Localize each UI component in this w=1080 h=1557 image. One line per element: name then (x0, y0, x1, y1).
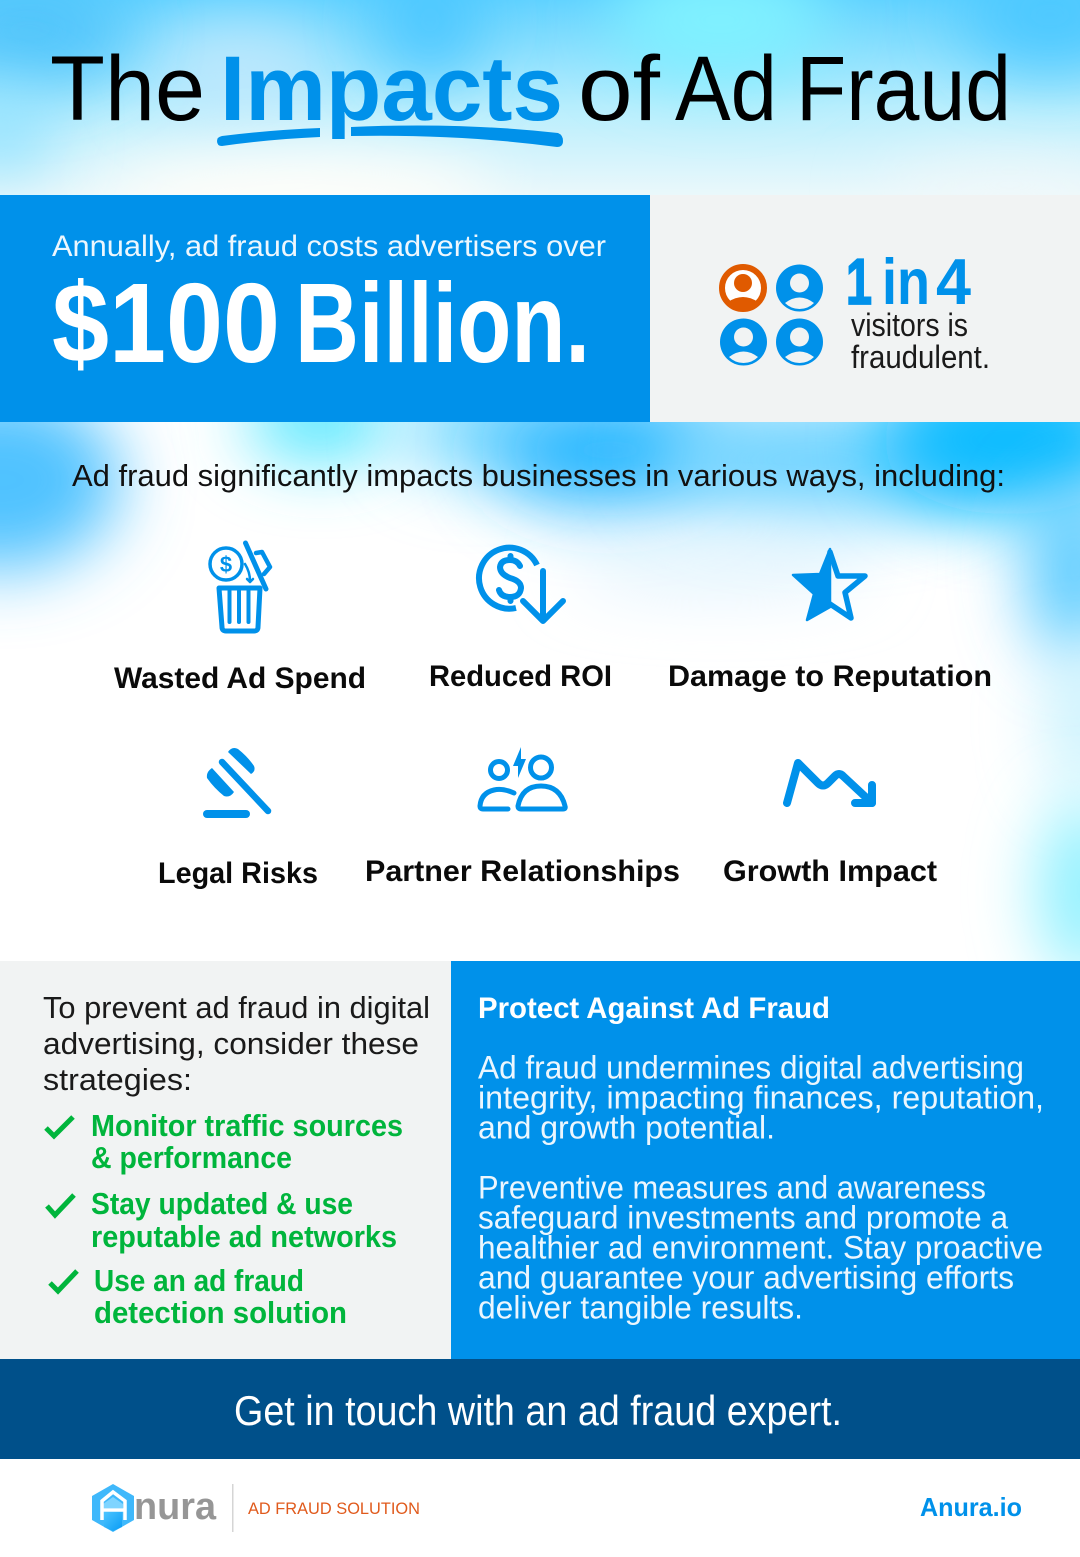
title: Impacts (220, 38, 563, 140)
label: Damage to Reputation (668, 660, 992, 693)
stat number: in (882, 245, 930, 318)
panel: prevention strategies (0, 961, 451, 1359)
paragraph 1: integrity, impacting finances, reputation, (478, 1080, 1044, 1116)
strategy 2 (47, 1186, 397, 1254)
paragraph 1: and growth potential. (478, 1110, 775, 1146)
title: The (50, 38, 205, 140)
strategy 2: reputable ad networks (91, 1219, 397, 1254)
footer (0, 1459, 1080, 1557)
strategies intro: advertising, consider these (43, 1026, 419, 1061)
icon: blue person 3 (776, 318, 823, 366)
strategy 1 (46, 1108, 403, 1175)
label: Wasted Ad Spend (114, 662, 366, 695)
impact: wasted ad spend (114, 543, 366, 695)
panel: 100 billion cost: Billion. (295, 260, 590, 386)
call to action band: Get in touch with an ad fraud expert. (234, 1387, 842, 1434)
paragraph 1 (478, 1050, 1044, 1146)
impact: growth impact (723, 763, 937, 888)
strategies intro: strategies: (43, 1062, 192, 1097)
icon: blue person 1 (776, 264, 823, 312)
website link: Anura.io (920, 1492, 1022, 1522)
icon: falling chart (787, 763, 872, 803)
panel: 100 billion cost (0, 195, 650, 422)
panel: 100 billion cost: $100 (52, 260, 280, 386)
panel: 100 billion cost: Annually, ad fraud costs advertisers over (52, 230, 606, 263)
call to action band (0, 1359, 1080, 1459)
paragraph 2 (478, 1170, 1043, 1326)
title underline (217, 125, 563, 147)
label: Reduced ROI (429, 660, 612, 693)
stat number: 1 (846, 245, 872, 318)
panel heading: Protect Against Ad Fraud (478, 992, 830, 1025)
title (50, 38, 1011, 147)
header background (0, 0, 1080, 195)
paragraph 2: healthier ad environment. Stay proactive (478, 1230, 1043, 1266)
strategy 3 (50, 1263, 347, 1330)
tagline: AD FRAUD SOLUTION (248, 1499, 420, 1518)
stat caption (851, 307, 990, 375)
title: of (578, 38, 660, 140)
strategies intro (43, 990, 430, 1097)
icon: trash and coin (210, 543, 270, 631)
stat caption: fraudulent. (851, 339, 990, 375)
stat number: 4 (936, 245, 971, 318)
anura logo: nura (134, 1486, 217, 1528)
anura logo (92, 1484, 217, 1532)
paragraph 2: and guarantee your advertising efforts (478, 1260, 1014, 1296)
icon: gavel (203, 748, 268, 818)
title: Ad (675, 38, 777, 140)
intro sentence: Ad fraud significantly impacts businesses in various ways, including: (72, 458, 1005, 493)
icon: orange person (722, 267, 764, 309)
icon: half star (793, 549, 865, 620)
impacts background (0, 422, 1080, 961)
label: Growth Impact (723, 855, 937, 888)
icon: blue person 2 (720, 318, 767, 366)
impact: partner relationships (365, 747, 680, 888)
impact: legal risks (158, 748, 318, 890)
strategy 1: Monitor traffic sources (91, 1108, 403, 1143)
strategy 2: Stay updated & use (91, 1186, 353, 1221)
strategy 3: detection solution (94, 1295, 347, 1330)
strategies intro: To prevent ad fraud in digital (43, 990, 430, 1025)
strategy 1: & performance (91, 1140, 292, 1175)
title: Fraud (796, 38, 1011, 140)
paragraph 2: safeguard investments and promote a (478, 1200, 1008, 1236)
paragraph 1: Ad fraud undermines digital advertising (478, 1050, 1024, 1086)
strategy 3: Use an ad fraud (94, 1263, 304, 1298)
stat number (846, 245, 971, 318)
paragraph 2: deliver tangible results. (478, 1290, 803, 1326)
panel: protect against ad fraud (451, 961, 1080, 1359)
stat caption: visitors is (851, 307, 968, 343)
impact: reduced ROI (429, 548, 612, 693)
icon: two people with lightning bolt (480, 747, 565, 809)
label: Legal Risks (158, 857, 318, 890)
panel: 1 in 4 stat (650, 195, 1080, 422)
impact: damage to reputation (668, 549, 992, 693)
paragraph 2: Preventive measures and awareness (478, 1170, 986, 1206)
impact: wasted ad spend: $ (220, 552, 232, 577)
icon: dollar with down arrow (479, 548, 563, 621)
label: Partner Relationships (365, 855, 680, 888)
